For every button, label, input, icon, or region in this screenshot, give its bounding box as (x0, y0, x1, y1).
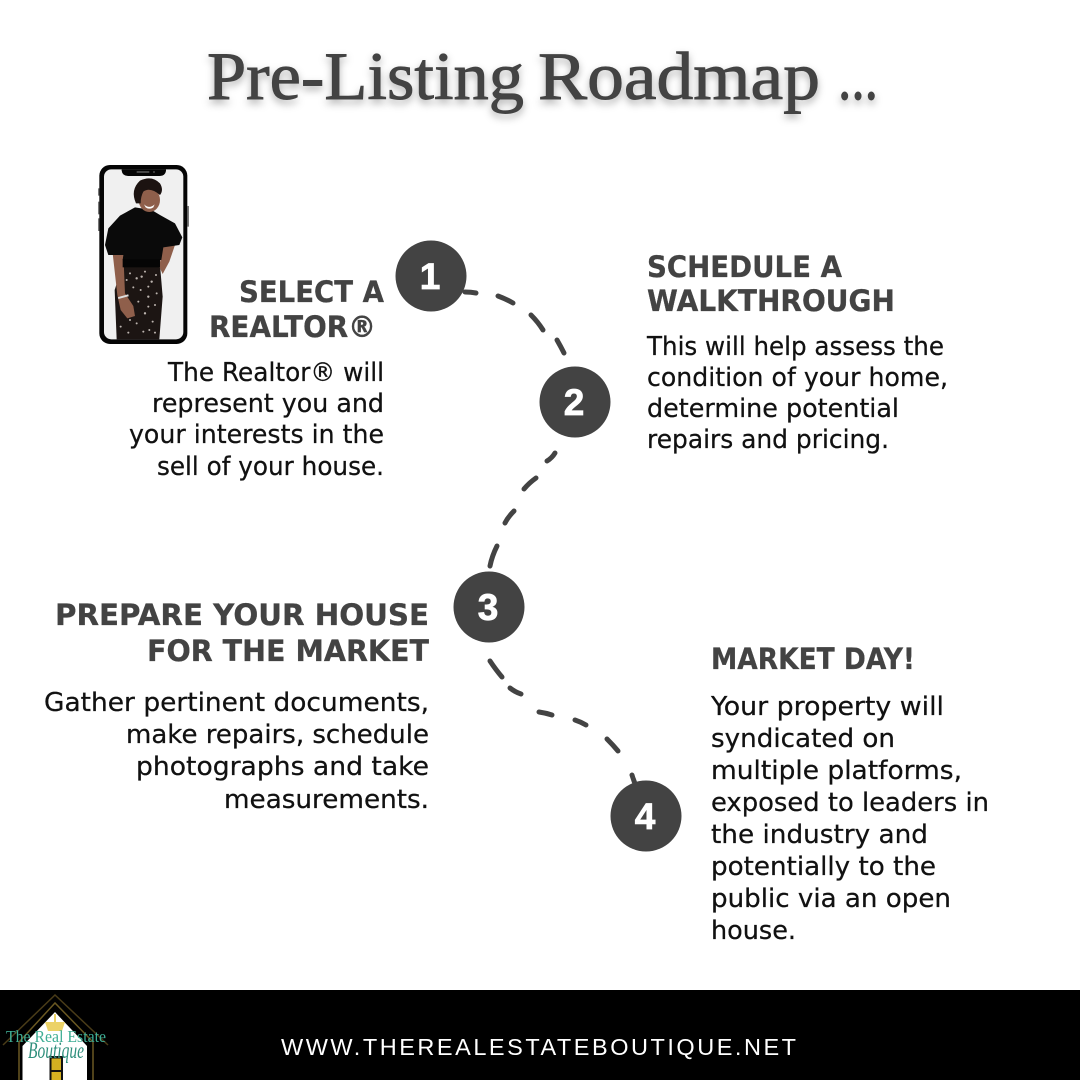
step 1 number badge: 1 (420, 256, 440, 297)
text: step 3 description: photographs and take (136, 752, 429, 782)
panel: step 4 market day (710, 642, 989, 946)
panel: step 1 select a realtor (129, 275, 385, 482)
heading: prepare your house for the market: PREPARE YOUR HOUSE (55, 598, 429, 632)
heading: select a realtor: REALTOR® (209, 310, 376, 344)
heading: prepare your house for the market: FOR THE MARKET (147, 634, 429, 668)
step 3 number badge: 3 (478, 587, 498, 628)
text: step 2 description (646, 332, 948, 455)
panel: step 3 prepare your house (44, 598, 429, 815)
heading: select a realtor (209, 275, 385, 344)
text: step 3 description: Gather pertinent documents, (44, 688, 429, 718)
arms and hand (113, 253, 135, 318)
heading: schedule a walkthrough: WALKTHROUGH (647, 284, 895, 318)
logo: the real estate boutique house: Boutique (28, 1038, 84, 1063)
step 4 number badge (610, 780, 682, 852)
text: step 4 description: public via an open (711, 884, 951, 914)
blouse (105, 207, 182, 260)
text: step 2 description: condition of your home, (647, 363, 948, 393)
step 1 number badge (396, 240, 466, 312)
footer bar (0, 990, 1080, 1080)
heading: schedule a walkthrough (647, 250, 895, 318)
heading: select a realtor: SELECT A (239, 275, 385, 309)
text: step 1 description: represent you and (152, 389, 384, 419)
title: Roadmap (538, 38, 820, 114)
text: step 4 description: multiple platforms, (711, 756, 962, 786)
text: step 1 description: your interests in the (129, 420, 384, 450)
step 4 number badge: 4 (635, 796, 656, 837)
logo: the real estate boutique house (3, 995, 108, 1080)
text: step 4 description: Your property will (710, 692, 944, 722)
trousers (115, 265, 163, 339)
panel: step 2 schedule a walkthrough (646, 250, 948, 455)
text: step 3 description: make repairs, schedule (126, 720, 429, 750)
logo: the real estate boutique house: The Real Estate (6, 1027, 106, 1046)
heading: market day: MARKET DAY! (711, 642, 915, 676)
icon: phone with realtor photo (98, 165, 189, 344)
text: step 4 description: the industry and (711, 820, 928, 850)
text: step 1 description: The Realtor® will (167, 358, 384, 388)
text: step 3 description: measurements. (224, 785, 429, 815)
head and hair (139, 188, 160, 212)
text: step 2 description: determine potential (647, 394, 899, 424)
title: ... (838, 38, 878, 114)
step 3 number badge (454, 572, 524, 642)
text: step 2 description: This will help assess the (646, 332, 944, 362)
text: step 4 description: exposed to leaders in (711, 788, 989, 818)
title: Pre-Listing (207, 38, 524, 114)
title (207, 38, 878, 114)
text: step 2 description: repairs and pricing. (647, 425, 889, 455)
icon: door (50, 1056, 63, 1080)
footer website url: WWW.THEREALESTATEBOUTIQUE.NET (281, 1034, 796, 1060)
text: step 4 description (710, 692, 989, 946)
icon: chandelier (45, 1014, 65, 1031)
step 2 number badge: 2 (564, 382, 584, 423)
text: step 1 description (129, 358, 384, 482)
path: dashed route between steps (465, 292, 637, 788)
text: step 1 description: sell of your house. (157, 452, 384, 482)
text: step 4 description: potentially to the (711, 852, 936, 882)
text: step 4 description: syndicated on (711, 724, 895, 754)
heading: schedule a walkthrough: SCHEDULE A (647, 250, 843, 284)
text: step 4 description: house. (711, 916, 796, 946)
text: step 3 description (44, 688, 429, 815)
heading: prepare your house for the market (55, 598, 429, 668)
step 2 number badge (540, 366, 610, 438)
